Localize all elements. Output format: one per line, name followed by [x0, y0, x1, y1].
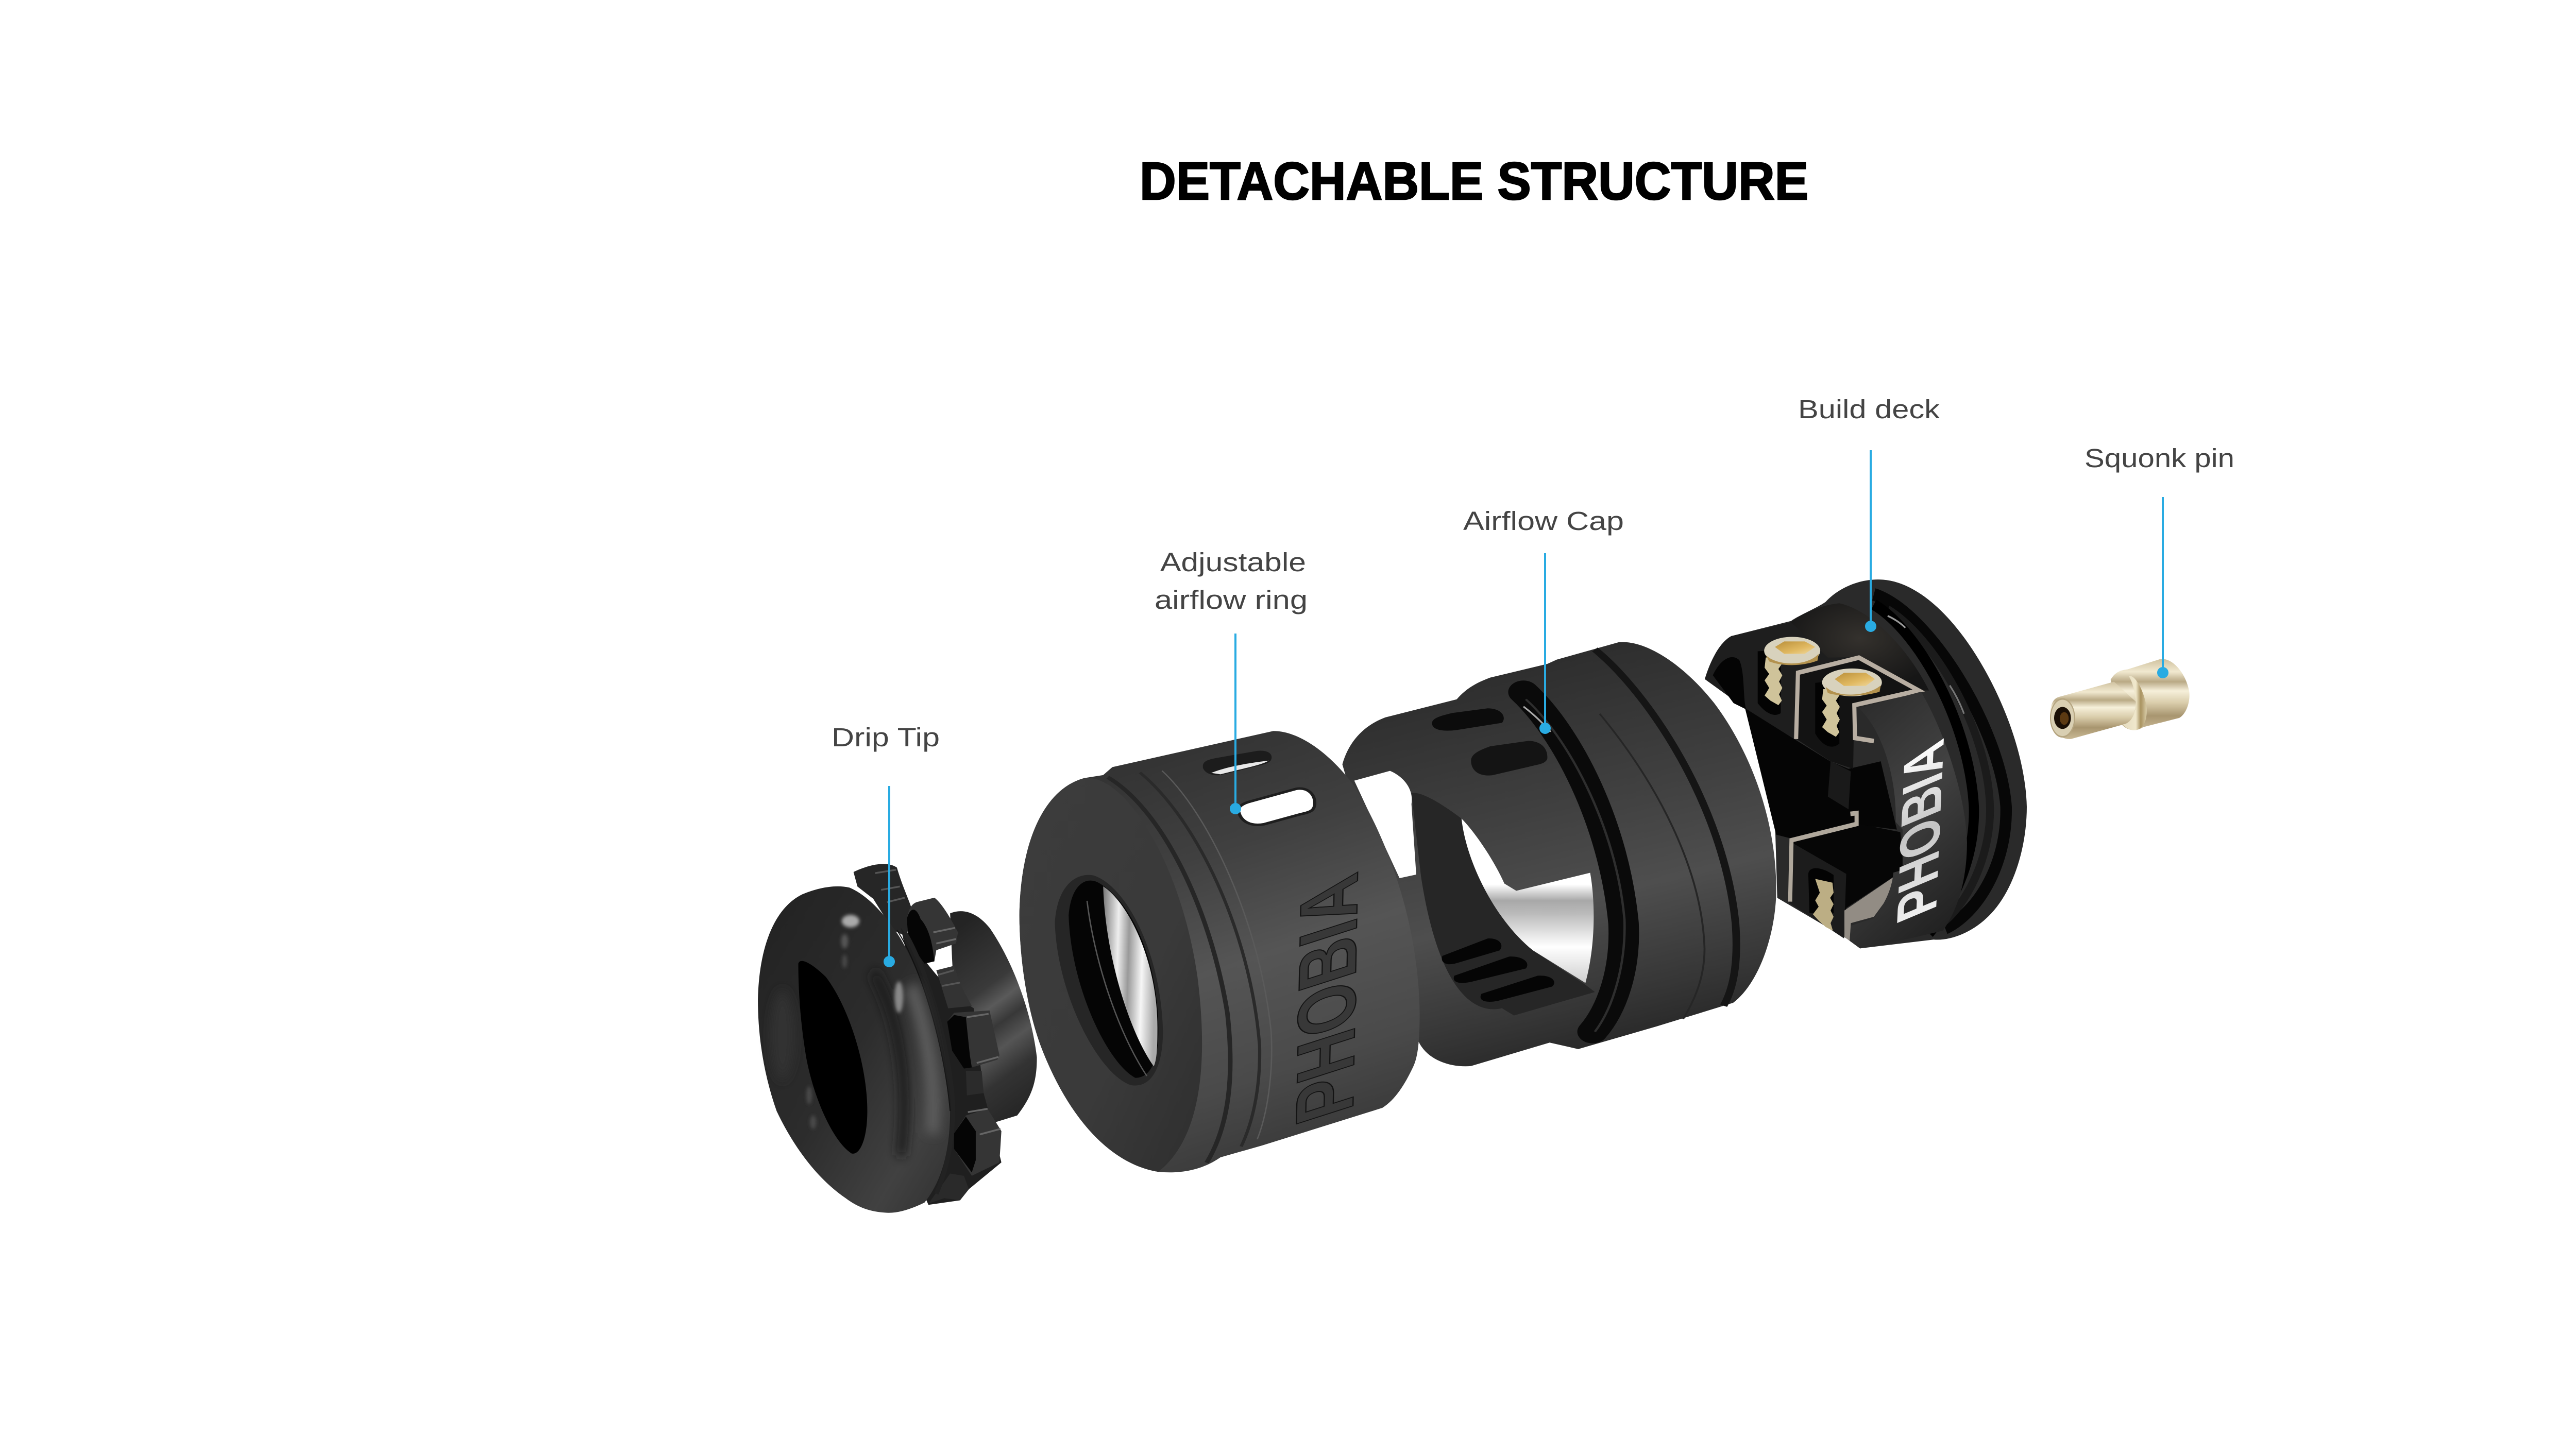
callout: squonk pin: Squonk pin [2084, 443, 2234, 473]
callout: drip tip [832, 723, 940, 967]
left window [1354, 771, 1416, 878]
callout: build deck: Build deck [1798, 395, 1940, 424]
callout: airflow cap [1463, 506, 1624, 734]
part: adjustable airflow ring [1020, 731, 1420, 1172]
bore [1055, 875, 1163, 1085]
torus and flange body [758, 886, 950, 1213]
callout: adjustable airflow ring: Adjustable [1160, 548, 1306, 577]
part: build deck [1705, 579, 2027, 948]
rear cylinder [1791, 603, 1929, 691]
screw pockets [1758, 650, 1781, 715]
drip bore [799, 961, 867, 1154]
gear lobes [854, 864, 1002, 1205]
dark block [1745, 708, 1897, 839]
title: DETACHABLE STRUCTURE [1140, 151, 1808, 211]
arch recess [1713, 657, 1746, 709]
toothed rim [901, 928, 1002, 1205]
drip tip back cylinder [950, 911, 1037, 1122]
logo: white PHOBIA on build deck: PHOBIA [1885, 732, 1956, 931]
ring silhouette [1020, 731, 1420, 1172]
cap band lines [1595, 649, 1736, 1006]
flange seam [897, 930, 950, 1111]
lobe upper [907, 898, 958, 964]
screw heads [1764, 637, 1820, 665]
lobe middle [947, 1011, 999, 1069]
torus highlights [806, 915, 903, 1129]
lobe bottom [928, 1174, 969, 1204]
callout: adjustable airflow ring: airflow ring [1155, 585, 1308, 614]
upper slots [1432, 708, 1504, 731]
cap silhouette [1343, 642, 1776, 1066]
callout: adjustable airflow ring [1155, 548, 1308, 814]
part: drip tip [758, 864, 1037, 1213]
ring face [1020, 778, 1202, 1172]
part: squonk pin [2050, 659, 2190, 739]
inner wall [1412, 793, 1595, 1016]
second post [1795, 660, 1917, 769]
callout: airflow cap: Airflow Cap [1463, 506, 1624, 536]
callout: squonk pin [2084, 443, 2234, 678]
lobe top [854, 864, 912, 937]
ring band lines [1108, 777, 1230, 1163]
lower slots [1442, 938, 1501, 964]
upper post [1705, 622, 1859, 739]
central window with silver tube [1462, 818, 1594, 983]
plates [1796, 658, 1919, 741]
lobe lower [954, 1109, 1002, 1176]
o-ring bands [1874, 594, 2006, 928]
small link [966, 1071, 984, 1096]
upper slot [1203, 751, 1272, 775]
logo: embossed PHOBIA on ring: PHOBIA [1278, 865, 1376, 1134]
lower post [1789, 823, 1904, 938]
callout: build deck [1798, 395, 1940, 632]
o-ring [1523, 692, 1624, 1032]
torus shading [771, 972, 933, 1156]
part: airflow cap [1343, 642, 1776, 1066]
lower slot [1239, 789, 1315, 825]
screw threads [1765, 655, 1782, 705]
callout: drip tip: Drip Tip [832, 723, 940, 752]
build deck flange [1705, 579, 2027, 948]
logo crescent [1850, 692, 1967, 948]
